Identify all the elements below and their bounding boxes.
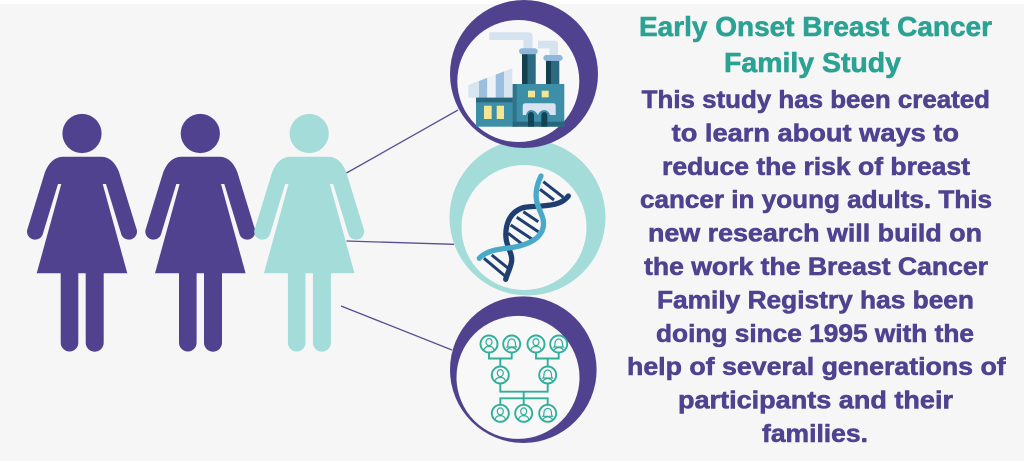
icon: DNA helix bbox=[479, 176, 568, 279]
text block: study description: families. bbox=[762, 420, 868, 448]
text block: study description bbox=[627, 86, 1006, 448]
title bbox=[639, 11, 992, 78]
text block: study description: This study has been created bbox=[642, 86, 990, 114]
circle: factory ring bbox=[450, 0, 598, 148]
connector lines from figure to circles bbox=[341, 110, 458, 350]
circle: family tree ring bbox=[450, 296, 597, 443]
text block: study description: reduce the risk of breast bbox=[662, 153, 971, 181]
text block: study description: Family Registry has been bbox=[657, 286, 974, 314]
text block: study description: cancer in young adults. This bbox=[640, 186, 992, 214]
text block: study description: new research will build on bbox=[648, 220, 982, 248]
figure: first woman, purple bbox=[27, 114, 137, 352]
icon: factory bbox=[468, 32, 564, 127]
text block: study description: participants and their bbox=[678, 387, 953, 415]
figure: third woman, light teal bbox=[254, 114, 364, 352]
icon: family tree bbox=[480, 336, 567, 422]
title: Family Study bbox=[724, 47, 901, 78]
text block: study description: help of several generations of bbox=[627, 353, 1006, 381]
text block: study description: doing since 1995 with the bbox=[656, 320, 974, 348]
text block: study description: the work the Breast Cancer bbox=[644, 253, 988, 281]
title: Early Onset Breast Cancer bbox=[639, 11, 992, 42]
circle: DNA ring bbox=[450, 140, 606, 296]
figure: second woman, purple bbox=[145, 114, 255, 352]
text block: study description: to learn about ways to bbox=[672, 119, 959, 147]
